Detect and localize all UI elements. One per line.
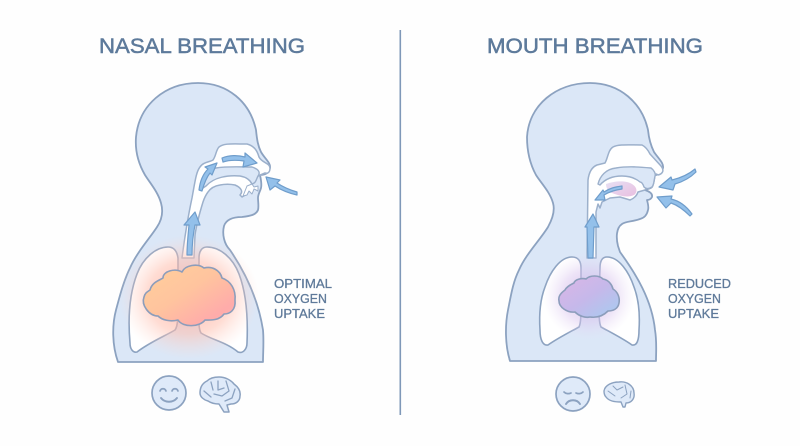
- airway: nasal passage, mouth and trachea: [182, 144, 270, 258]
- label: optimal oxygen uptake: OXYGEN: [274, 291, 327, 306]
- panel: mouth breathing figure: [506, 83, 731, 411]
- hard palate: [598, 167, 655, 188]
- hard palate: [200, 167, 259, 190]
- arrow: trachea upward: [184, 212, 200, 255]
- teeth: [243, 184, 258, 196]
- center divider: [400, 30, 401, 415]
- label: reduced oxygen uptake: [668, 276, 731, 321]
- icon: healthy brain: [200, 377, 240, 412]
- label: reduced oxygen uptake: UPTAKE: [668, 306, 719, 321]
- arrow: inhaling through nose: [266, 177, 297, 195]
- warm cloud: [143, 265, 235, 326]
- title: nasal breathing: NASAL BREATHING: [99, 35, 305, 58]
- label: optimal oxygen uptake: UPTAKE: [274, 306, 325, 321]
- left lung: [540, 257, 581, 345]
- icon: sad face: [556, 377, 590, 411]
- cool glow: [543, 252, 635, 340]
- body silhouette: [113, 83, 270, 362]
- label: optimal oxygen uptake: [274, 276, 332, 321]
- airway: open mouth and throat: [587, 145, 663, 258]
- arrow: inhaling upper: [659, 169, 696, 190]
- panel: nasal breathing figure: [113, 83, 332, 412]
- warm glow: [119, 235, 259, 359]
- right lung: [199, 247, 247, 352]
- icon: happy face: [152, 376, 186, 410]
- label: reduced oxygen uptake: REDUCED: [668, 276, 731, 291]
- cool cloud: [559, 276, 619, 317]
- arrow: pharynx upward: [199, 163, 217, 191]
- body silhouette: [506, 83, 663, 361]
- arrow: mouth to throat: [595, 186, 622, 200]
- icon: tired brain: [604, 382, 634, 407]
- arrow: trachea upward: [585, 214, 599, 258]
- label: optimal oxygen uptake: OPTIMAL: [274, 276, 332, 291]
- arrow: inhaling lower: [657, 196, 692, 216]
- left lung: [129, 247, 178, 352]
- title: mouth breathing: MOUTH BREATHING: [487, 35, 703, 58]
- right lung: [599, 257, 639, 345]
- tongue: [606, 181, 636, 196]
- label: reduced oxygen uptake: OXYGEN: [668, 291, 721, 306]
- arrow: nasal cavity: [222, 153, 257, 167]
